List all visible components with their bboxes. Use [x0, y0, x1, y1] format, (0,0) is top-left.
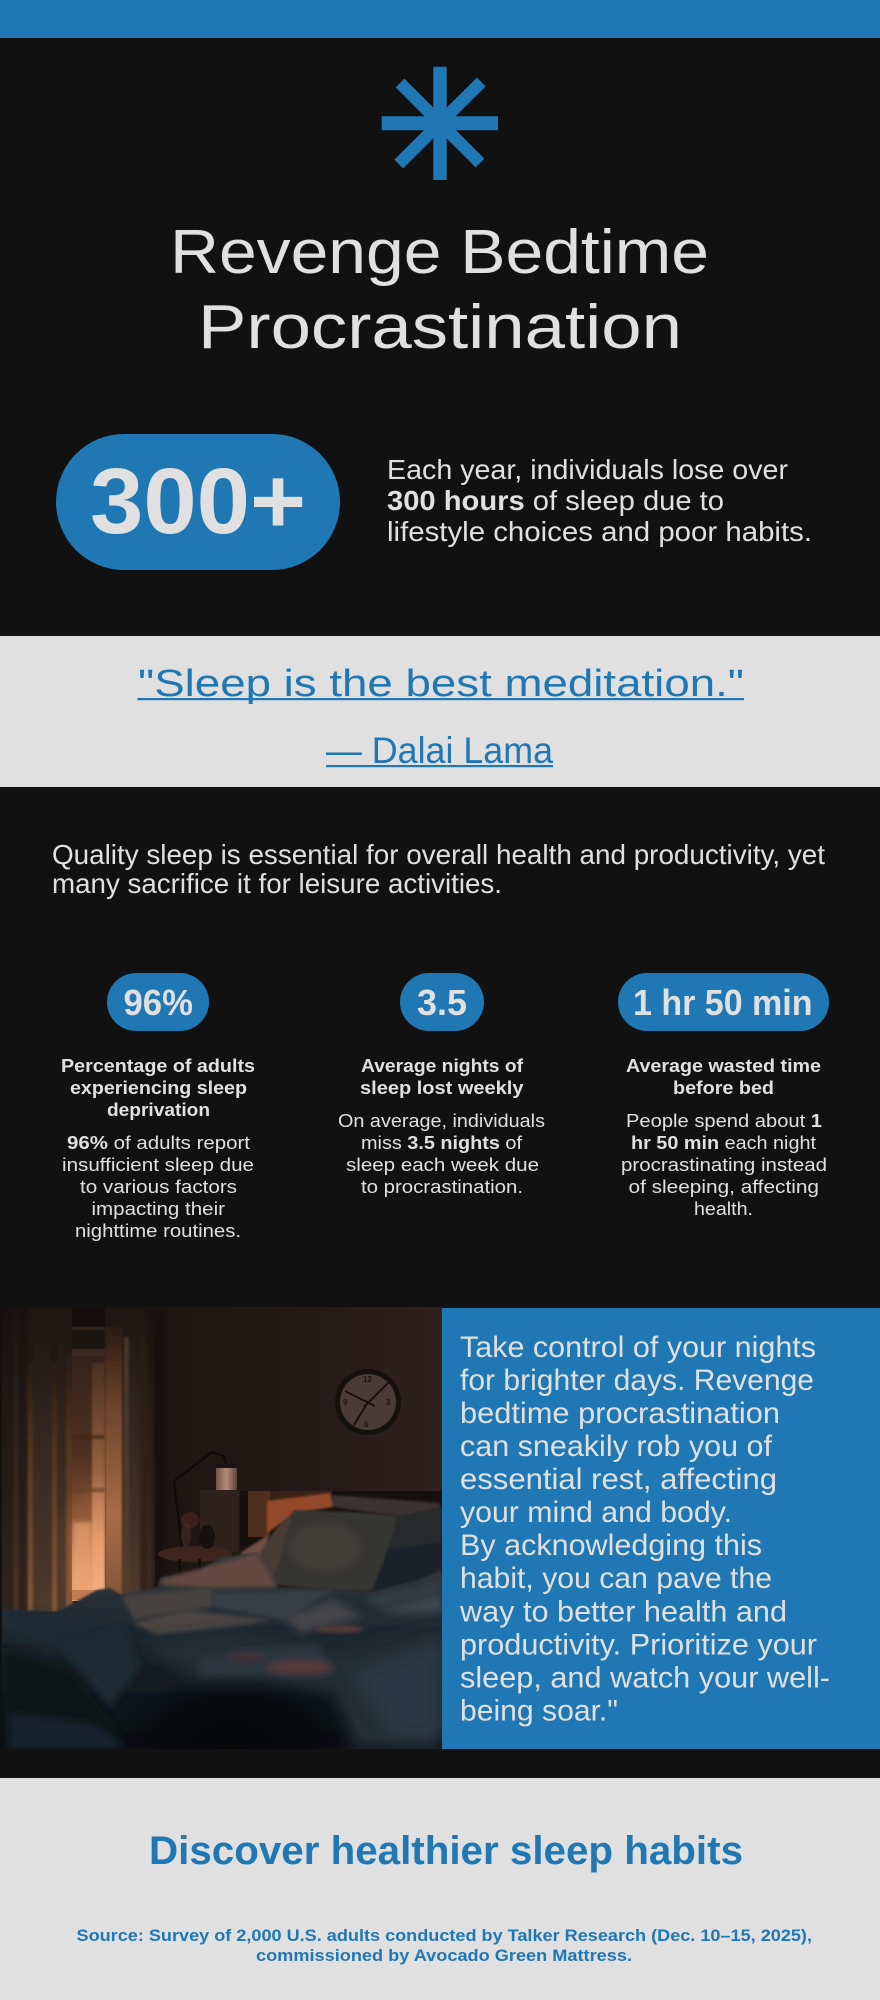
body text: to procrastination.	[361, 1177, 523, 1197]
pill: 96%: 96%	[124, 982, 193, 1023]
icon: asterisk	[382, 67, 498, 180]
paragraph: By acknowledging this	[460, 1529, 762, 1562]
stat pill	[56, 434, 340, 570]
paragraph: bedtime procrastination	[460, 1397, 780, 1430]
paragraph: way to better health and	[459, 1596, 787, 1628]
bedding	[2, 1551, 442, 1749]
body text: On average, individuals	[338, 1111, 545, 1131]
panel: stat 96%	[61, 973, 255, 1241]
body text	[338, 1111, 545, 1197]
panel: call to action text	[442, 1308, 880, 1749]
body text: of sleeping, affecting	[628, 1177, 819, 1197]
image: dark bedroom at night	[2, 1307, 442, 1749]
intro paragraph: many sacrifice it for leisure activities.	[52, 868, 502, 899]
pill: 3.5	[400, 973, 484, 1031]
pill: 96%	[107, 973, 209, 1031]
heading: nights lost: Average nights of	[361, 1056, 524, 1076]
quote attribution: — Dalai Lama	[326, 730, 553, 771]
body text: nighttime routines.	[75, 1221, 241, 1241]
panel: stat 1 hr 50 min	[618, 973, 829, 1219]
heading: wasted time: before bed	[673, 1078, 774, 1098]
paragraph: your mind and body.	[460, 1496, 732, 1529]
pill: 1 hr 50 min	[618, 973, 829, 1031]
body text: impacting their	[92, 1199, 225, 1219]
paragraph: being soar."	[460, 1694, 618, 1728]
top accent bar	[0, 0, 880, 38]
large fluffy pillows	[257, 1510, 398, 1591]
lamp	[174, 1452, 237, 1555]
intro paragraph	[52, 839, 825, 899]
wood panel behind table	[200, 1490, 239, 1552]
paragraph: essential rest, affecting	[460, 1463, 777, 1496]
heading: percentage of adults: experiencing sleep	[70, 1078, 247, 1098]
shadow in lower centre	[140, 1678, 337, 1749]
body text: miss 3.5 nights of	[361, 1133, 523, 1153]
body text: 96% of adults report	[67, 1133, 250, 1153]
stat callout: 300+	[56, 434, 340, 570]
source note: Source: Survey of 2,000 U.S. adults conducted by Talker Research (Dec. 10–15, 2025),	[76, 1926, 812, 1945]
body text: hr 50 min each night	[631, 1133, 816, 1153]
heading: percentage of adults: Percentage of adults	[61, 1056, 255, 1076]
window frame top	[72, 1307, 105, 1357]
source note	[76, 1926, 812, 1965]
body text	[621, 1111, 827, 1219]
body text: to various factors	[80, 1177, 237, 1197]
left folds	[2, 1606, 63, 1647]
back pillows	[240, 1493, 442, 1592]
heading: percentage of adults: deprivation	[107, 1100, 210, 1120]
title: Procrastination	[198, 293, 682, 362]
stat description: 300 hours of sleep due to	[387, 485, 724, 516]
paragraph: can sneakily rob you of	[460, 1430, 773, 1463]
body text: health.	[694, 1199, 753, 1219]
stat description	[387, 454, 812, 547]
paragraph: for brighter days. Revenge	[460, 1364, 814, 1397]
title	[170, 218, 709, 362]
paragraph: Take control of your nights	[460, 1331, 816, 1364]
left curtain	[0, 1307, 73, 1612]
pill: 3.5: 3.5	[417, 982, 467, 1023]
clock: 6	[364, 1420, 369, 1429]
quote text: "Sleep is the best meditation."	[138, 663, 744, 705]
paragraph: productivity. Prioritize your	[460, 1628, 817, 1662]
clock: 9	[343, 1398, 348, 1407]
heading: nights lost: sleep lost weekly	[360, 1078, 524, 1098]
heading: wasted time: Average wasted time	[626, 1056, 821, 1076]
clock	[335, 1369, 401, 1435]
right curtain	[104, 1326, 155, 1595]
clock: 3	[386, 1398, 391, 1407]
heading: nights lost	[360, 1056, 524, 1098]
panel: stat 3.5	[338, 973, 545, 1197]
body text: insufficient sleep due	[62, 1155, 254, 1175]
pill: 1 hr 50 min: 1 hr 50 min	[633, 982, 812, 1023]
paragraph	[459, 1331, 830, 1728]
panel: quote band	[0, 636, 880, 787]
paragraph: habit, you can pave the	[460, 1562, 772, 1595]
lit blanket folds	[160, 1553, 277, 1588]
clock: 12	[363, 1375, 372, 1384]
intro paragraph: Quality sleep is essential for overall health and productivity, yet	[52, 839, 825, 870]
body text: sleep each week due	[346, 1155, 539, 1175]
panel: footer	[0, 1778, 880, 2000]
mid bedding	[140, 1630, 442, 1749]
glowing window	[72, 1356, 110, 1601]
paragraph: sleep, and watch your well-	[460, 1662, 830, 1694]
body text: procrastinating instead	[621, 1155, 827, 1175]
heading: percentage of adults	[61, 1056, 255, 1120]
headboard	[240, 1491, 442, 1557]
window glow spill	[60, 1488, 96, 1582]
stat description: Each year, individuals lose over	[387, 454, 788, 485]
title: Revenge Bedtime	[170, 218, 709, 287]
source note: commissioned by Avocado Green Mattress.	[256, 1946, 632, 1965]
stat number: 300+	[90, 449, 306, 553]
body text	[62, 1133, 254, 1241]
stat description: lifestyle choices and poor habits.	[387, 516, 812, 547]
body text: People spend about 1	[626, 1111, 822, 1131]
heading: wasted time	[626, 1056, 821, 1098]
footer heading: Discover healthier sleep habits	[149, 1829, 743, 1873]
night table with objects	[158, 1512, 232, 1574]
